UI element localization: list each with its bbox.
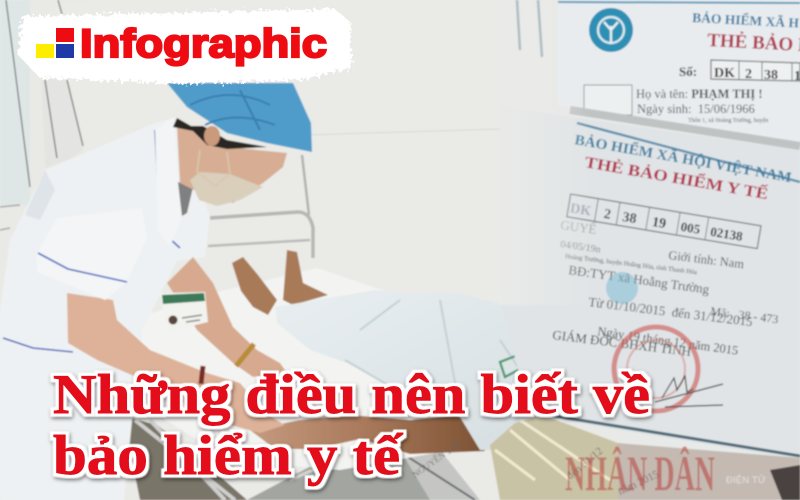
- card number boxes: 2: [603, 207, 612, 223]
- nurse far arm: [167, 257, 287, 377]
- card details: Mã: 38 - 473: [710, 304, 779, 326]
- card details: 04/05/19n: [560, 239, 601, 256]
- mirrored card text on fold: đến 31/12: [564, 445, 605, 482]
- signature: [655, 376, 723, 407]
- holder details: Thôn 1, xã Hoàng Trường, huyện: [688, 118, 768, 124]
- holder details: Họ và tên: PHẠM THỊ !: [636, 87, 762, 101]
- surgical mask: [190, 172, 263, 206]
- nurse uniform: [0, 117, 210, 500]
- card number: [679, 60, 800, 84]
- collar and neck: [155, 117, 182, 247]
- gown hospital emblem: [500, 355, 532, 377]
- nurse: [0, 83, 312, 500]
- holder details: Ngày sinh: 15/06/1966: [637, 102, 755, 116]
- logo banner: [18, 9, 352, 84]
- logo squares: [36, 28, 74, 58]
- blue stamp: [606, 272, 638, 304]
- card details: Từ 01/10/2015 đến 31/12/2015: [588, 294, 753, 329]
- logo word: Infographic: [80, 22, 327, 66]
- bed frame and rail: [127, 155, 480, 500]
- blue surgical cap: [167, 83, 312, 152]
- hair: [173, 118, 267, 149]
- patient lower leg: [250, 415, 485, 454]
- card number boxes: [567, 194, 761, 249]
- card details: Ngày 19 tháng 12 năm 2015: [597, 324, 739, 358]
- left fade of card: [500, 105, 590, 305]
- uniform sleeve: [37, 208, 147, 300]
- card details: Giới tính: Nam: [668, 248, 745, 271]
- mirrored card text on fold: năm 2015: [616, 468, 661, 498]
- card details: Hoàng Trường, huyện Hoằng Hóa, tỉnh Thanh Hóa: [565, 253, 697, 276]
- headline line 1: Những điều nên biết về: [53, 364, 650, 426]
- patient feet: [232, 250, 328, 315]
- patient: [232, 250, 626, 500]
- card number: 2: [745, 67, 752, 82]
- nurse near arm: [67, 293, 285, 433]
- headline: [53, 364, 650, 487]
- card details: GUYẾ: [560, 217, 597, 237]
- card details: GIÁM ĐỐC BHXH TỈNH: [552, 327, 692, 359]
- folded blanket: [490, 415, 626, 500]
- headline line 2: bảo hiểm y tế: [53, 425, 403, 487]
- white brush background: [18, 9, 352, 84]
- insurance card: top: [558, 0, 800, 145]
- lower card strip: [410, 437, 800, 500]
- beaded wristband: [201, 366, 203, 384]
- card details: [552, 217, 779, 359]
- card number boxes: 38: [621, 210, 638, 227]
- card number boxes: 02138: [709, 224, 744, 244]
- card number: Số:: [679, 64, 697, 79]
- gold bracelet: [236, 344, 254, 366]
- card number boxes: DK: [569, 201, 592, 220]
- watermark: điện tử: ĐIỆN TỬ: [726, 474, 766, 486]
- card heading: BẢO HIỂM XÃ HỘI VIỆT NAM: [573, 130, 793, 186]
- ID badge: [160, 292, 208, 332]
- card heading: BẢO HIỂM XÃ H: [692, 10, 800, 31]
- card details: BĐ:TYT xã Hoằng Trường: [568, 262, 711, 297]
- insurance card: front: [500, 105, 800, 460]
- mirrored card text on fold: [410, 437, 661, 498]
- holder details: [636, 87, 768, 124]
- card logo: [589, 8, 633, 52]
- holder photo box: [584, 85, 632, 115]
- blue trim lines: [3, 130, 180, 352]
- mirrored card text on fold: NGUYỄN 1987: [410, 437, 464, 480]
- red stamp: [614, 327, 698, 411]
- face: [177, 127, 287, 203]
- card number: 38: [764, 68, 778, 83]
- bed sheet: [130, 268, 560, 470]
- card number: DK: [714, 66, 735, 81]
- ear: [204, 126, 220, 146]
- card number boxes: 005: [680, 219, 702, 237]
- card title: THẺ BẢO HIỂM Y TẾ: [583, 152, 770, 203]
- patient gown: [275, 290, 590, 450]
- card number boxes: 19: [651, 215, 667, 232]
